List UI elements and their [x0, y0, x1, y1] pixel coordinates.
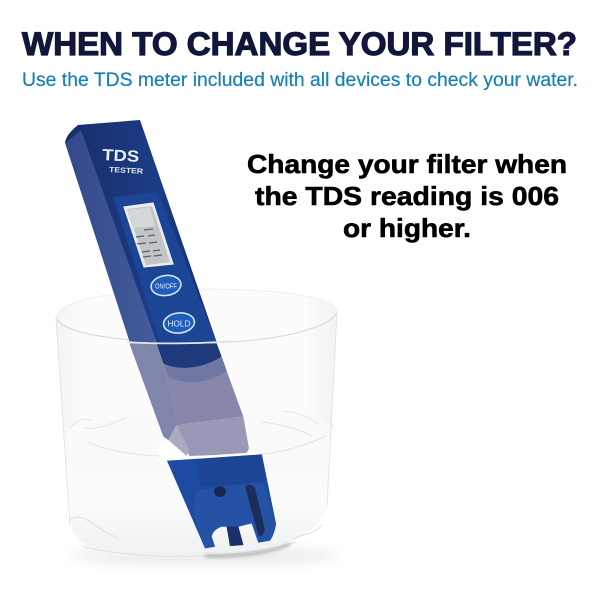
water [66, 414, 331, 557]
tip shaded centre [197, 453, 266, 487]
ON/OFF button [150, 274, 182, 297]
LCD display [124, 203, 173, 267]
callout: change filter instruction [247, 149, 567, 243]
water surface line [158, 453, 262, 460]
ON/OFF button: ON/OFF [155, 284, 177, 290]
tip lower section [193, 482, 276, 548]
glass rim [56, 312, 337, 343]
meter side panel above rim [65, 125, 157, 343]
glass bottom dark reflection [205, 544, 290, 556]
callout: change filter instruction: the TDS reading is 006 [255, 181, 559, 211]
callout: change filter instruction: or higher. [343, 213, 471, 243]
glass body [56, 289, 337, 558]
label: TDS: TDS [102, 147, 140, 166]
meter tip under water [167, 453, 276, 548]
meter front face [78, 120, 217, 343]
TDS meter [65, 120, 276, 548]
water refraction gap [158, 440, 186, 459]
glass shadow [70, 548, 340, 564]
collar facet [168, 425, 189, 456]
dark blue band [157, 343, 222, 368]
illustration: glass of water with TDS meter [56, 120, 340, 564]
sensor slot [245, 485, 265, 536]
label: TESTER: TESTER [109, 165, 144, 176]
HOLD button: HOLD [168, 320, 191, 328]
meter lower body seen through glass [129, 343, 249, 456]
title: WHEN TO CHANGE YOUR FILTER? [22, 26, 577, 62]
HOLD button [163, 311, 195, 335]
sensor hole [214, 486, 226, 497]
grey body [157, 343, 243, 425]
callout: change filter instruction: Change your filter when [247, 149, 567, 179]
meter face light band [113, 192, 217, 343]
middle tine [227, 527, 243, 546]
glass bottom details [70, 517, 322, 557]
subtitle: Use the TDS meter included with all devices to check your water. [22, 69, 578, 91]
blue-grey band [163, 357, 227, 382]
glass front rim highlight [127, 341, 232, 343]
water surface ripples [70, 411, 334, 456]
side facet [129, 343, 189, 450]
collar [177, 417, 249, 456]
